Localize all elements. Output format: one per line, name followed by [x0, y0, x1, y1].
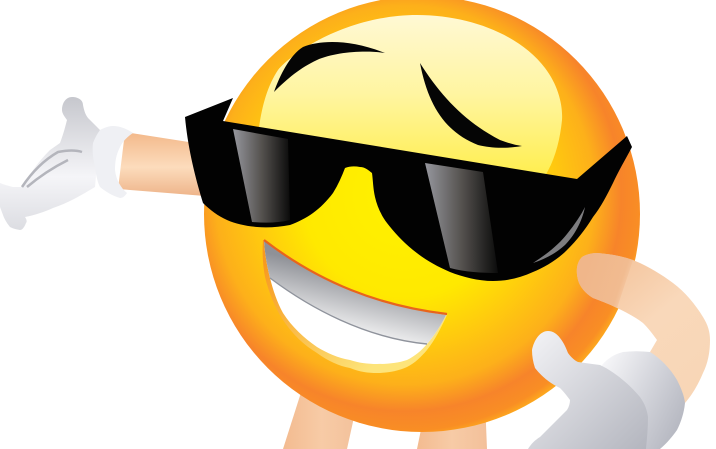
forehead highlight	[259, 15, 562, 176]
sunglasses	[185, 98, 632, 281]
hand and thumb	[528, 331, 648, 449]
upper teeth shade	[264, 241, 446, 344]
right lens reflection	[425, 163, 498, 273]
left eyebrow	[274, 42, 385, 92]
cuff	[93, 126, 133, 198]
lip line	[264, 240, 447, 314]
tooth line	[270, 278, 427, 344]
right eyebrow	[420, 63, 522, 148]
right arm	[577, 253, 710, 403]
cuff	[602, 351, 685, 449]
smile	[263, 240, 447, 373]
upper arm shade over face	[577, 253, 633, 308]
left glove	[0, 97, 133, 230]
right temple glint	[533, 207, 585, 263]
left leg	[283, 380, 360, 449]
right leg	[417, 400, 487, 449]
left lens reflection	[233, 129, 290, 223]
teeth	[264, 241, 446, 364]
left arm	[118, 132, 205, 196]
face	[204, 0, 640, 432]
finger creases	[22, 150, 82, 187]
right glove	[528, 331, 685, 449]
